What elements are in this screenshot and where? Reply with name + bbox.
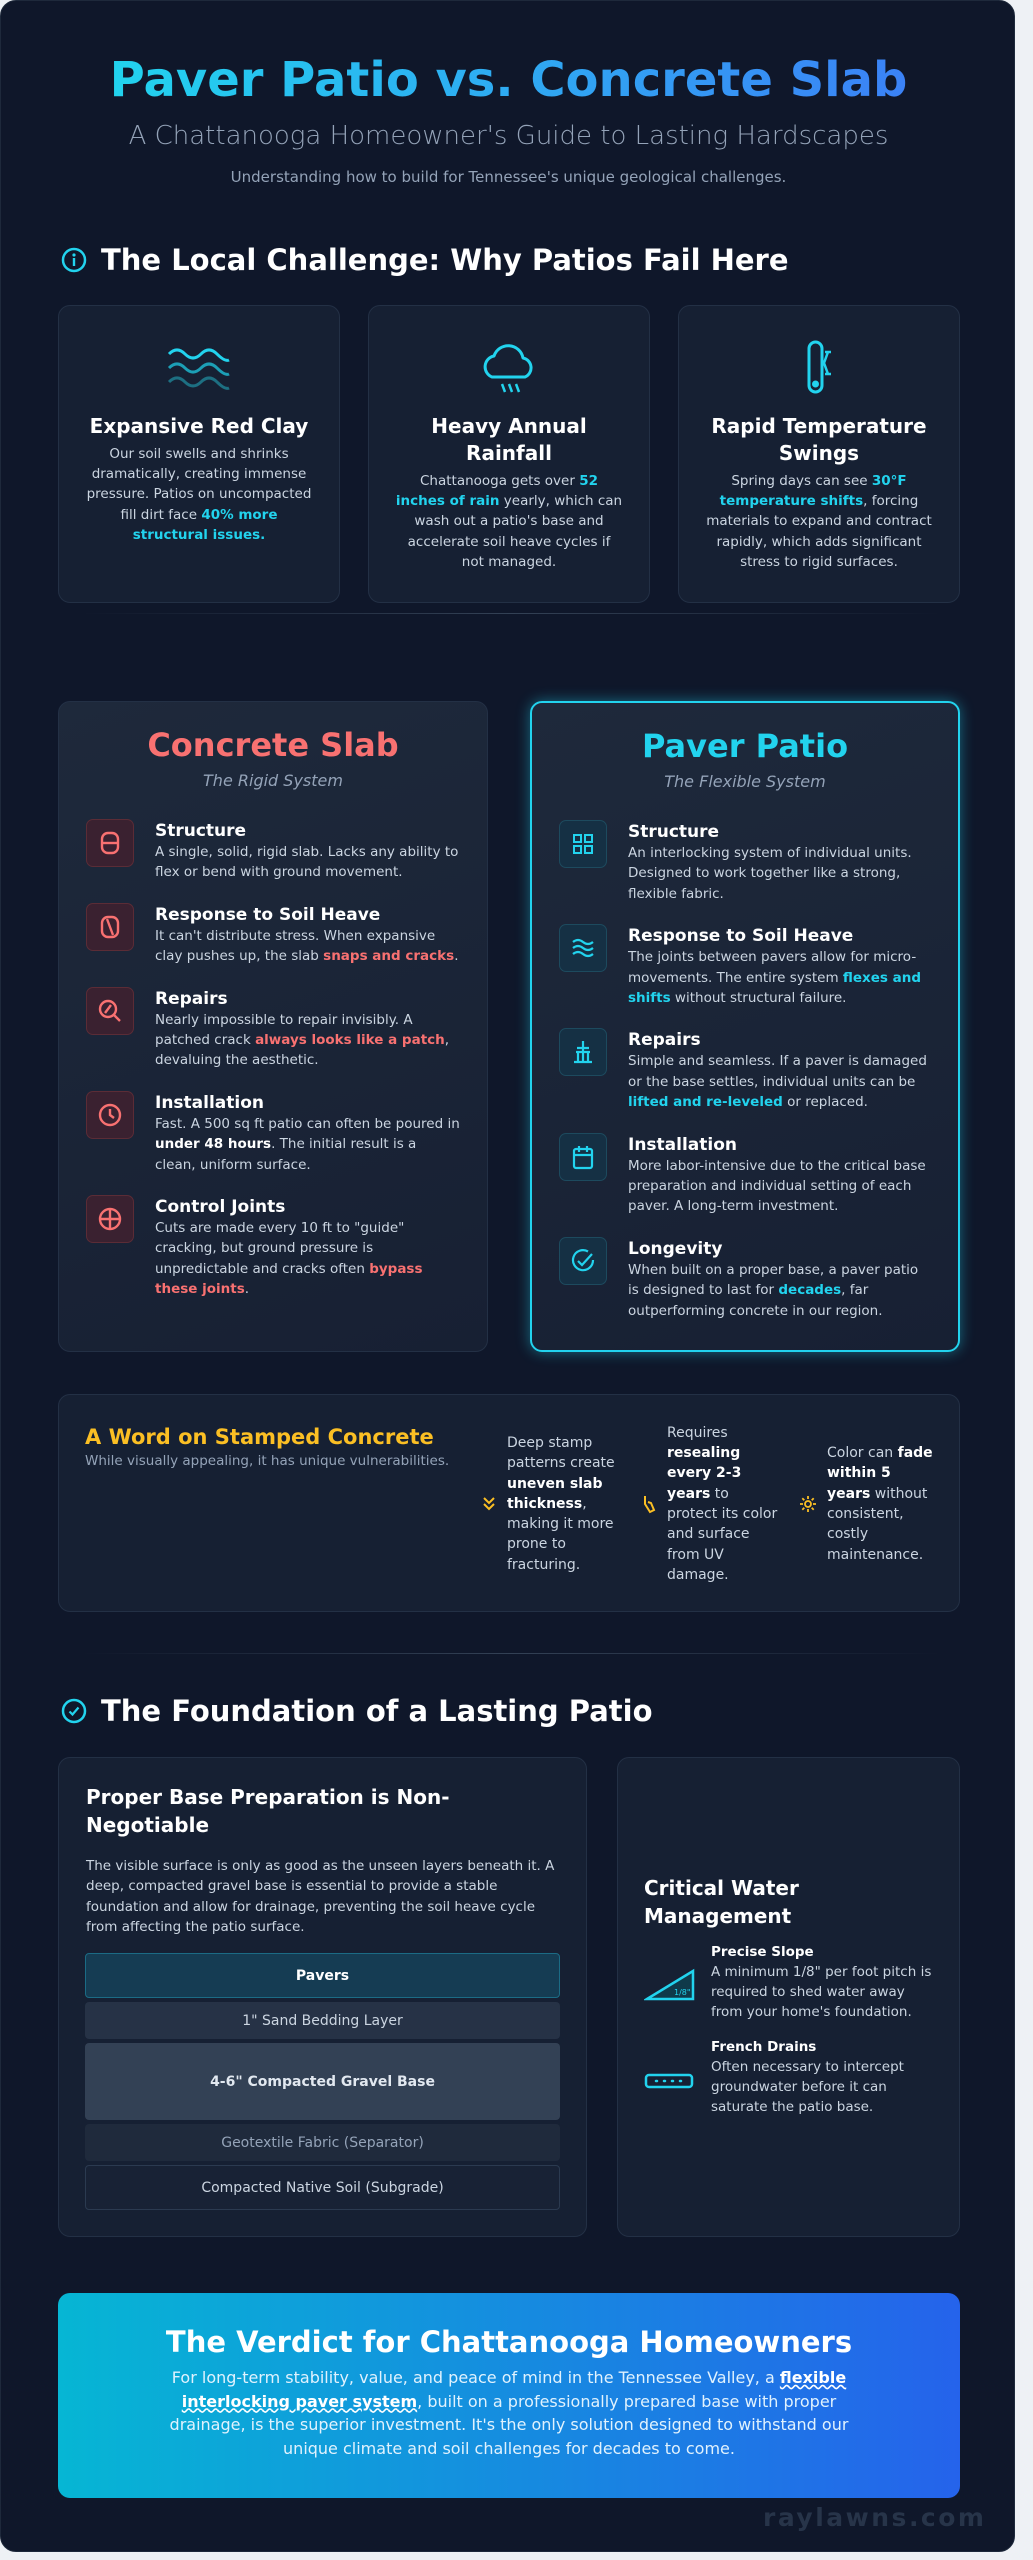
- panel: heavy annual rainfall: Chattanooga gets over 52: [420, 473, 598, 489]
- icon: thermometer: [808, 340, 831, 394]
- heading: foundation: The Foundation of a Lasting Patio: [101, 1694, 653, 1728]
- item: longevity: [559, 1237, 918, 1319]
- verdict banner: [58, 2293, 960, 2498]
- item: longevity: Longevity: [628, 1239, 722, 1259]
- item: french drains: [644, 2039, 904, 2115]
- panel: concrete slab: The Rigid System: [203, 771, 343, 790]
- panel: paver patio: The Flexible System: [664, 772, 826, 791]
- item: structure: Structure: [155, 821, 246, 841]
- panel: water management: Critical Water: [644, 1876, 799, 1900]
- icon: clay waves: [168, 348, 230, 390]
- item: precise slope: 1/8": [674, 1988, 691, 1997]
- panel: expansive red clay: dramatically, creating immense: [92, 466, 306, 482]
- page card: Compacted Native Soil (Subgrade): [201, 2180, 444, 2196]
- item: installation: [86, 1091, 460, 1173]
- point: fading: consistent,: [827, 1506, 904, 1522]
- verdict banner: For long-term stability, value, and peace of mind in the Tennessee Valley, a flexible interlocking paver system, built on a professionally prepared base with proper drainage, is the superior investment. It's the only solution designed to withstand our unique climate and soil challenges for decades to come.: [170, 2368, 848, 2458]
- item: precise slope: Precise Slope: [711, 1944, 814, 1960]
- panel: concrete slab: [58, 701, 488, 1352]
- panel: expansive red clay: pressure. Patios on uncompacted: [87, 486, 311, 502]
- item: structure: A single, solid, rigid slab. Lacks any ability to flex or bend with ground movement.: [155, 844, 458, 880]
- heading: local challenge: The Local Challenge: Why Patios Fail Here: [101, 243, 789, 277]
- item: structure: An interlocking system of individual units. Designed to work together like a strong, flexible fabric.: [628, 845, 912, 902]
- point: resealing: Requires resealing every 2-3 years to protect its color and surface from UV damage.: [667, 1425, 777, 1583]
- item: soil heave: [559, 924, 921, 1006]
- item: structure: Structure: [628, 822, 719, 842]
- item: soil heave: Response to Soil Heave: [155, 905, 380, 925]
- item: installation: Installation: [628, 1135, 737, 1155]
- item: repairs: Nearly impossible to repair invisibly. A patched crack always looks like a patch, devaluing the aesthetic.: [155, 1012, 449, 1068]
- panel: rapid temperature swings: rapidly, which adds significant: [716, 534, 922, 550]
- tagline: Understanding how to build for Tennessee's unique geological challenges.: [231, 168, 786, 186]
- title: Paver Patio vs. Concrete Slab: [110, 52, 907, 108]
- item: installation: [559, 1133, 926, 1214]
- item: soil heave: Response to Soil Heave: [628, 926, 853, 946]
- panel: expansive red clay: Our soil swells and shrinks: [109, 446, 289, 462]
- subtitle: A Chattanooga Homeowner's Guide to Lasting Hardscapes: [129, 121, 888, 151]
- panel: rapid temperature swings: Spring days can see 30°F: [731, 473, 907, 489]
- panel: expansive red clay: Expansive Red Clay: [90, 414, 308, 438]
- panel: rapid temperature swings: [678, 305, 960, 603]
- point: fading: maintenance.: [827, 1547, 923, 1563]
- panel: expansive red clay: [58, 305, 340, 603]
- panel: heavy annual rainfall: wash out a patio's base and: [414, 513, 604, 529]
- panel: expansive red clay: fill dirt face 40% more: [121, 507, 277, 523]
- item: soil heave: [86, 903, 458, 964]
- item: installation: Installation: [155, 1093, 264, 1113]
- panel: heavy annual rainfall: accelerate soil heave cycles if: [408, 534, 610, 550]
- item: french drains: French Drains: [711, 2039, 816, 2055]
- page card: 4-6" Compacted Gravel Base: [210, 2074, 435, 2090]
- panel: rapid temperature swings: temperature shifts, forcing: [720, 493, 918, 509]
- item: soil heave: It can't distribute stress. When expansive clay pushes up, the slab snaps and cracks.: [155, 928, 458, 964]
- panel: heavy annual rainfall: [368, 305, 650, 603]
- page card: 1" Sand Bedding Layer: [242, 2012, 403, 2028]
- panel: expansive red clay: structural issues.: [133, 527, 265, 543]
- point: uneven thickness: Deep stamp patterns create uneven slab thickness, making it more prone to fracturing.: [507, 1435, 615, 1573]
- item: installation: Fast. A 500 sq ft patio can often be poured in under 48 hours. The initial result is a clean, uniform surface.: [155, 1116, 460, 1173]
- item: repairs: [86, 987, 449, 1068]
- panel: paver patio: Paver Patio: [642, 727, 848, 765]
- item: control joints: Cuts are made every 10 ft to "guide" cracking, but ground pressure is unpredictable and cracks often bypass these joints.: [155, 1220, 422, 1297]
- diagram: base layers: [85, 1953, 560, 2210]
- icon: rain cloud: [484, 344, 533, 392]
- heading: stamped concrete: While visually appealing, it has unique vulnerabilities.: [85, 1453, 449, 1469]
- panel: heavy annual rainfall: inches of rain yearly, which can: [396, 493, 622, 509]
- panel: rapid temperature swings: materials to expand and contract: [706, 513, 932, 529]
- panel: water management: Management: [644, 1904, 791, 1928]
- panel: rapid temperature swings: stress to rigid surfaces.: [740, 554, 898, 570]
- panel: water management: [617, 1757, 960, 2237]
- item: control joints: Control Joints: [155, 1197, 285, 1217]
- item: repairs: [559, 1028, 927, 1110]
- point: fading: within 5: [827, 1465, 891, 1481]
- item: longevity: When built on a proper base, a paver patio is designed to last for decades, far outperforming concrete in our region.: [628, 1262, 918, 1319]
- point: fading: Color can fade: [827, 1445, 933, 1461]
- watermark: raylawns.com: [763, 2503, 986, 2532]
- page card: Pavers: [296, 1968, 349, 1984]
- point: fading: costly: [827, 1526, 868, 1542]
- heading: stamped concrete: [85, 1425, 449, 1469]
- panel: concrete slab: Concrete Slab: [147, 726, 399, 764]
- point: fading: years without: [827, 1486, 927, 1502]
- item: installation: More labor-intensive due to the critical base preparation and individual setting of each paver. A long-term investment.: [628, 1158, 926, 1214]
- verdict banner: The Verdict for Chattanooga Homeowners: [166, 2325, 852, 2359]
- page card: Geotextile Fabric (Separator): [221, 2134, 424, 2150]
- item: french drains: Often necessary to intercept groundwater before it can saturate the patio base.: [711, 2059, 904, 2115]
- item: soil heave: The joints between pavers allow for micro-movements. The entire system flexes and shifts without structural failure.: [628, 949, 921, 1006]
- point: fading: [800, 1445, 933, 1563]
- item: structure: [86, 819, 458, 880]
- heading: stamped concrete: A Word on Stamped Concrete: [85, 1425, 434, 1449]
- panel: base preparation: The visible surface is only as good as the unseen layers beneath it. A deep, compacted gravel base is essential to provide a stable foundation and allow for drainage, preventing the soil heave cycle from affecting the patio surface.: [86, 1858, 554, 1935]
- panel: base preparation: [58, 1757, 587, 2237]
- item: structure: [559, 820, 912, 902]
- item: control joints: [86, 1195, 422, 1297]
- panel: heavy annual rainfall: Heavy Annual Rainfall: [431, 414, 587, 465]
- item: repairs: Repairs: [628, 1030, 701, 1050]
- panel: paver patio: [530, 701, 960, 1352]
- item: precise slope: [644, 1944, 931, 2020]
- panel: base preparation: Proper Base Preparation is Non-Negotiable: [86, 1785, 450, 1837]
- panel: stamped concrete: [58, 1394, 960, 1612]
- panel: heavy annual rainfall: not managed.: [462, 554, 556, 570]
- item: precise slope: A minimum 1/8" per foot pitch is required to shed water away from your home's foundation.: [711, 1964, 931, 2020]
- item: repairs: Simple and seamless. If a paver is damaged or the base settles, individual units can be lifted and re-leveled or replaced.: [628, 1053, 927, 1110]
- item: repairs: Repairs: [155, 989, 228, 1009]
- panel: rapid temperature swings: Rapid Temperature Swings: [711, 414, 927, 465]
